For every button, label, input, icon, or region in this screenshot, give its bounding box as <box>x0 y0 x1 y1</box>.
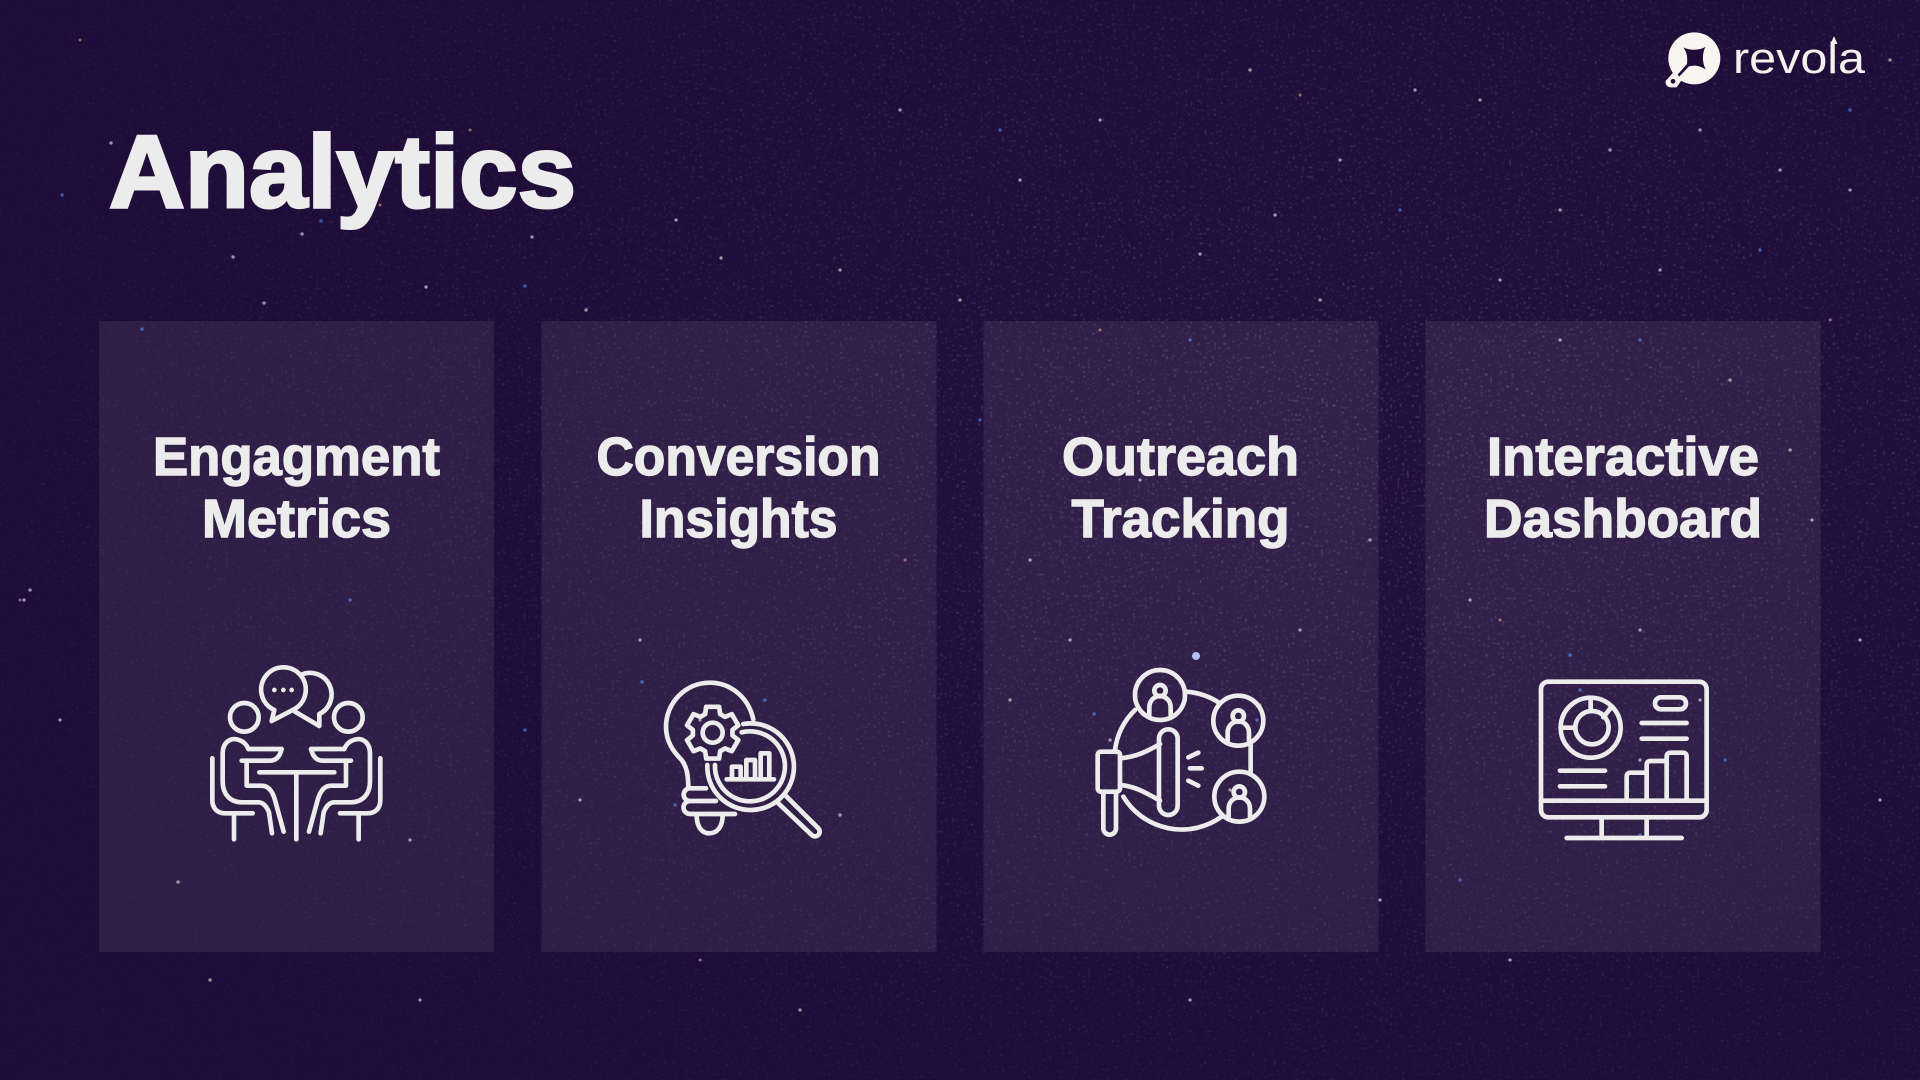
heading: Outreach Tracking: Outreach <box>1062 427 1299 487</box>
heading: Engagment Metrics: Engagment <box>153 427 440 487</box>
logo: revola <box>1666 32 1866 87</box>
logo icon <box>1666 32 1720 87</box>
logo wordmark: revola <box>1733 34 1866 83</box>
heading: Conversion Insights: Conversion <box>596 427 880 487</box>
panel: Outreach Tracking <box>984 321 1378 952</box>
icon: dashboard monitor <box>1541 682 1707 838</box>
heading: Conversion Insights: Insights <box>640 489 838 549</box>
title: Analytics <box>109 114 576 229</box>
heading: Conversion Insights <box>596 427 880 549</box>
heading: Interactive Dashboard: Dashboard <box>1484 489 1762 549</box>
heading: Engagment Metrics <box>153 427 440 549</box>
heading: Outreach Tracking: Tracking <box>1072 489 1290 549</box>
heading: Interactive Dashboard <box>1484 427 1762 549</box>
panel: Engagment Metrics <box>99 321 494 952</box>
heading: Interactive Dashboard: Interactive <box>1487 427 1759 487</box>
heading: Outreach Tracking <box>1062 427 1299 549</box>
icon: megaphone and people <box>1098 670 1264 835</box>
panel: Conversion Insights <box>542 321 936 952</box>
heading: Engagment Metrics: Metrics <box>202 489 391 549</box>
icon: light bulb and magnifier <box>666 683 820 836</box>
icon: people meeting at table <box>212 667 380 839</box>
panel: Interactive Dashboard <box>1426 321 1820 952</box>
